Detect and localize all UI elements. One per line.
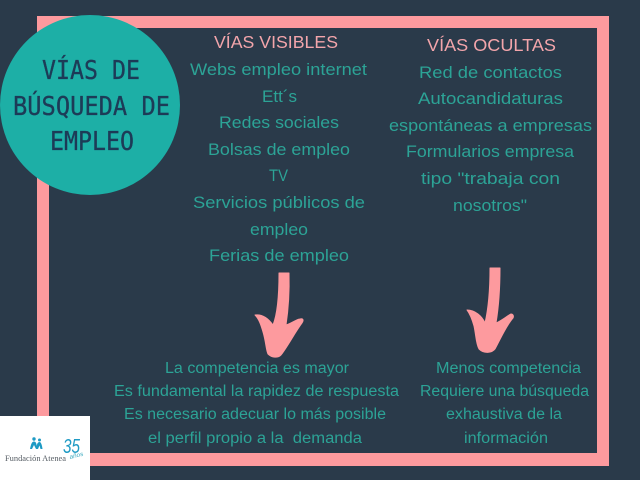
text block: hidden channels list: nosotros" xyxy=(453,196,527,215)
text block: hidden channels list xyxy=(389,63,592,215)
text block: visible channels list: Webs empleo internet xyxy=(190,60,367,79)
text block: visible channels list: Servicios públicos de xyxy=(193,193,365,212)
text block: visible channels notes: Es necesario adecuar lo más posible xyxy=(124,406,386,423)
title xyxy=(13,54,170,157)
title: EMPLEO xyxy=(50,127,134,157)
text block: hidden channels notes: Menos competencia xyxy=(436,360,581,377)
text block: hidden channels notes xyxy=(420,360,589,447)
title: VÍAS DE xyxy=(42,54,140,86)
title circle xyxy=(0,15,180,195)
text block: visible channels list: Redes sociales xyxy=(219,113,339,132)
text block: hidden channels list: Formularios empresa xyxy=(406,142,575,161)
text block: hidden channels list: Red de contactos xyxy=(419,63,562,82)
text block: hidden channels list: tipo "trabaja con xyxy=(421,169,560,188)
text block: visible channels notes xyxy=(114,360,399,447)
text block: visible channels list: Ferias de empleo xyxy=(209,246,349,265)
text block: hidden channels notes: exhaustiva de la xyxy=(446,406,562,423)
title: BÚSQUEDA DE xyxy=(13,90,170,122)
logo: Fundación Atenea xyxy=(0,416,90,480)
logo: Fundación Atenea: Fundación Atenea xyxy=(5,453,66,463)
text block: hidden channels notes: Requiere una búsqueda xyxy=(420,383,589,400)
text block: visible channels notes: Es fundamental la rapidez de respuesta xyxy=(114,383,399,400)
text block: visible channels notes: el perfil propio a la demanda xyxy=(148,430,362,447)
text block: hidden channels list: espontáneas a empresas xyxy=(389,116,592,135)
arrow: left xyxy=(255,273,303,357)
text block: visible channels list: TV xyxy=(269,166,289,185)
text block: hidden channels notes: información xyxy=(464,430,548,447)
heading: vías ocultas: VÍAS OCULTAS xyxy=(427,35,556,55)
icon: figures xyxy=(30,437,42,449)
logo: Fundación Atenea: 35 xyxy=(63,436,81,458)
arrow: right xyxy=(467,268,513,352)
text block: hidden channels list: Autocandidaturas xyxy=(418,89,563,108)
logo: Fundación Atenea: años xyxy=(69,452,84,461)
text block: visible channels list: Ett´s xyxy=(262,87,297,106)
text block: visible channels notes: La competencia es mayor xyxy=(165,360,349,377)
heading: vías visibles: VÍAS VISIBLES xyxy=(214,32,338,52)
text block: visible channels list: Bolsas de empleo xyxy=(208,140,350,159)
text block: visible channels list: empleo xyxy=(250,220,308,239)
text block: visible channels list xyxy=(190,60,367,265)
